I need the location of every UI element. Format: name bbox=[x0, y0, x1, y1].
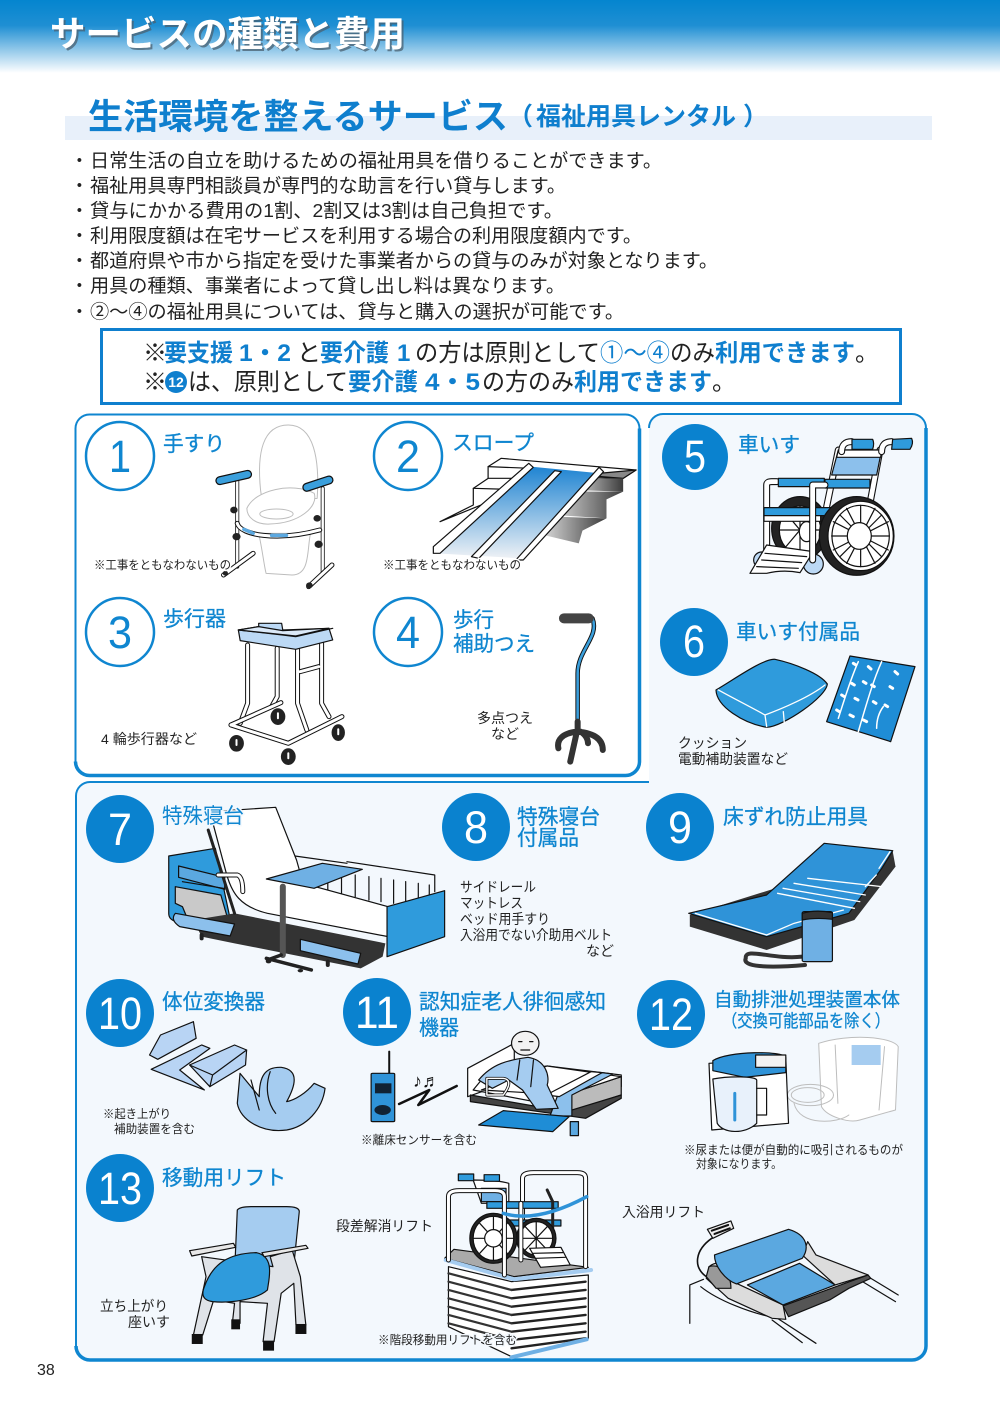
notice box: 4・5 bbox=[425, 369, 480, 396]
item 9 pressure sore mattress: 床ずれ防止用具 bbox=[723, 806, 868, 829]
item 4 walking cane: 補助つえ bbox=[453, 633, 535, 656]
item 8 bed accessories bbox=[442, 793, 614, 959]
item 2 slope: スロープ bbox=[452, 432, 534, 455]
caption: 入浴用でない介助用ベルト bbox=[460, 927, 612, 943]
item 5 wheelchair bbox=[662, 424, 913, 575]
item 2 slope bbox=[374, 422, 636, 572]
bullet list: ・ bbox=[70, 225, 89, 246]
notice box: 1 bbox=[397, 340, 410, 367]
item 8 bed accessories: 特殊寝台 bbox=[517, 806, 600, 829]
item 12 automatic excretion device: 12 bbox=[649, 989, 693, 1040]
bullet list bbox=[70, 150, 718, 322]
notice box: 要介護 bbox=[320, 340, 389, 367]
illustration: step lift bbox=[445, 1173, 591, 1357]
item 5 wheelchair: 5 bbox=[684, 431, 706, 482]
item 7 special bed bbox=[86, 795, 445, 972]
notice box: ※ bbox=[143, 340, 167, 367]
item 10 position changer: 体位変換器 bbox=[162, 991, 265, 1014]
caption: 電動補助装置など bbox=[678, 751, 788, 767]
item 11 dementia wandering detector: 機器 bbox=[419, 1017, 459, 1040]
item 13 lifts: 13 bbox=[98, 1163, 142, 1214]
illustration: bed bbox=[169, 807, 445, 972]
caption: ベッド用手すり bbox=[460, 911, 550, 927]
bullet list: ・ bbox=[70, 150, 89, 171]
bullet list: 利用限度額は在宅サービスを利用する場合の利用限度額内です。 bbox=[90, 225, 642, 246]
bullet list: ・ bbox=[70, 275, 89, 296]
notice box: 。 bbox=[712, 369, 736, 396]
notice box: 要介護 bbox=[348, 369, 418, 396]
caption: 多点つえ bbox=[477, 710, 533, 726]
item 9 pressure sore mattress: 9 bbox=[668, 802, 692, 853]
bullet list: ・ bbox=[70, 250, 89, 271]
title banner bbox=[0, 0, 1000, 73]
illustration: detector and bed bbox=[371, 1031, 621, 1136]
illustration: cushions bbox=[716, 656, 915, 742]
item 3 walker bbox=[86, 598, 345, 765]
item 9 pressure sore mattress bbox=[646, 793, 895, 967]
bullet list: ・ bbox=[70, 175, 89, 196]
item 4 walking cane: 歩行 bbox=[453, 609, 494, 632]
illustration: cane bbox=[558, 618, 603, 762]
caption: ※離床センサーを含む bbox=[361, 1133, 477, 1147]
item 12 automatic excretion device bbox=[637, 980, 903, 1171]
item 2 slope: 2 bbox=[396, 431, 420, 482]
item 12 automatic excretion device: （交換可能部品を除く） bbox=[722, 1011, 890, 1031]
item 10 position changer bbox=[86, 979, 325, 1136]
bullet list: 貸与にかかる費用の1割、2割又は3割は自己負担です。 bbox=[90, 200, 563, 221]
caption: クッション bbox=[678, 735, 747, 751]
note: ※工事をともなわないもの bbox=[383, 558, 521, 572]
notice box: と bbox=[297, 340, 321, 367]
section heading: 生活環境を整えるサービス bbox=[88, 98, 508, 137]
illustration: wedge cushions bbox=[150, 1022, 325, 1130]
bullet list: ・ bbox=[70, 301, 89, 322]
item 8 bed accessories: 付属品 bbox=[517, 827, 579, 850]
bullet list: ②～④の福祉用具については、貸与と購入の選択が可能です。 bbox=[90, 301, 624, 322]
notice box: 利用できます bbox=[715, 340, 855, 367]
item 1 handrail: 1 bbox=[109, 431, 131, 482]
caption: ※尿または便が自動的に吸引されるものが bbox=[684, 1142, 903, 1157]
section heading: ） bbox=[743, 103, 768, 131]
item 13 lifts: 移動用リフト bbox=[162, 1167, 286, 1190]
notice box: 利用できます bbox=[574, 369, 712, 396]
label: 入浴用リフト bbox=[622, 1204, 705, 1220]
page number: 38 bbox=[37, 1362, 55, 1379]
notice box: 。 bbox=[855, 340, 879, 367]
item 4 walking cane: 4 bbox=[396, 607, 420, 658]
item 11 dementia wandering detector: 認知症老人徘徊感知 bbox=[419, 991, 606, 1014]
note: ※工事をともなわないもの bbox=[94, 558, 231, 572]
notice box bbox=[102, 330, 900, 404]
section heading bbox=[65, 98, 932, 140]
notice box: の方のみ bbox=[482, 369, 574, 396]
item 7 special bed: 特殊寝台 bbox=[162, 805, 244, 828]
notice box: 1・2 bbox=[239, 340, 291, 367]
notice box: ①～④ bbox=[600, 340, 670, 367]
notice box: の方は原則として bbox=[415, 340, 600, 367]
caption: ※起き上がり bbox=[103, 1106, 171, 1121]
illustration: wheelchair bbox=[750, 438, 913, 575]
bullet list: 用具の種類、事業者によって貸し出し料は異なります。 bbox=[90, 275, 565, 296]
panel: items 5 to 13 bbox=[76, 414, 926, 1360]
notice box: 要支援 bbox=[164, 340, 233, 367]
caption bbox=[103, 1106, 195, 1136]
item 10 position changer: 10 bbox=[98, 988, 142, 1039]
item 7 special bed: 7 bbox=[108, 804, 132, 855]
caption bbox=[684, 1142, 903, 1171]
icon: musical notes: ♪♬ bbox=[413, 1071, 440, 1091]
notice box: のみ bbox=[670, 340, 715, 367]
caption: 4 輪歩行器など bbox=[101, 731, 197, 747]
title banner: サービスの種類と費用 bbox=[50, 14, 405, 54]
item 5 wheelchair: 車いす bbox=[738, 434, 800, 457]
label: 段差解消リフト bbox=[336, 1218, 433, 1234]
item 3 walker: 3 bbox=[108, 607, 132, 658]
section heading: 福祉用具レンタル bbox=[536, 103, 736, 131]
item 4 walking cane bbox=[374, 598, 603, 762]
caption bbox=[477, 710, 533, 742]
illustration: mattress bbox=[689, 843, 895, 967]
item 12 automatic excretion device: 自動排泄処理装置本体 bbox=[714, 989, 900, 1011]
caption: 対象になります。 bbox=[696, 1157, 782, 1171]
illustration: toilet handrail bbox=[220, 425, 332, 588]
title banner: サービスの種類と費用 bbox=[52, 16, 407, 56]
notice box: は、原則として bbox=[188, 369, 348, 396]
bullet list: 都道府県や市から指定を受けた事業者からの貸与のみが対象となります。 bbox=[90, 250, 718, 271]
note: ※階段移動用リフトを含む bbox=[378, 1332, 517, 1347]
caption: など bbox=[491, 726, 519, 742]
caption bbox=[100, 1298, 170, 1330]
caption: など bbox=[586, 943, 614, 959]
item 3 walker: 歩行器 bbox=[163, 608, 226, 631]
caption: サイドレール bbox=[460, 879, 536, 895]
item 6 wheelchair accessories: 車いす付属品 bbox=[736, 621, 860, 644]
item 11 dementia wandering detector bbox=[343, 978, 621, 1147]
bullet list: 福祉用具専門相談員が専門的な助言を行い貸与します。 bbox=[90, 175, 566, 196]
caption: 座いす bbox=[128, 1314, 170, 1330]
illustration: walker bbox=[229, 623, 345, 765]
panel: items 1 to 4 bbox=[76, 414, 640, 776]
illustration: ramp on stairs bbox=[433, 458, 636, 560]
caption: 立ち上がり bbox=[100, 1298, 168, 1314]
item 1 handrail: 手すり bbox=[163, 433, 225, 456]
caption bbox=[678, 735, 788, 767]
caption bbox=[460, 879, 614, 959]
item 11 dementia wandering detector: 11 bbox=[355, 987, 399, 1038]
item 6 wheelchair accessories bbox=[660, 608, 915, 767]
caption: 補助装置を含む bbox=[114, 1122, 195, 1136]
notice box: ※ bbox=[143, 369, 167, 396]
section heading: （ bbox=[508, 103, 533, 131]
item 1 handrail bbox=[86, 422, 332, 588]
bullet list: 日常生活の自立を助けるための福祉用具を借りることができます。 bbox=[90, 150, 662, 171]
item 6 wheelchair accessories: 6 bbox=[683, 616, 705, 667]
illustration: bath lift bbox=[690, 1221, 898, 1343]
illustration: rising chair bbox=[190, 1207, 308, 1351]
illustration: device and pad bbox=[709, 1037, 898, 1131]
caption: マットレス bbox=[460, 895, 523, 911]
item 8 bed accessories: 8 bbox=[464, 802, 488, 853]
item 13 lifts bbox=[86, 1154, 898, 1357]
notice box: 12 bbox=[168, 374, 184, 390]
bullet list: ・ bbox=[70, 200, 89, 221]
